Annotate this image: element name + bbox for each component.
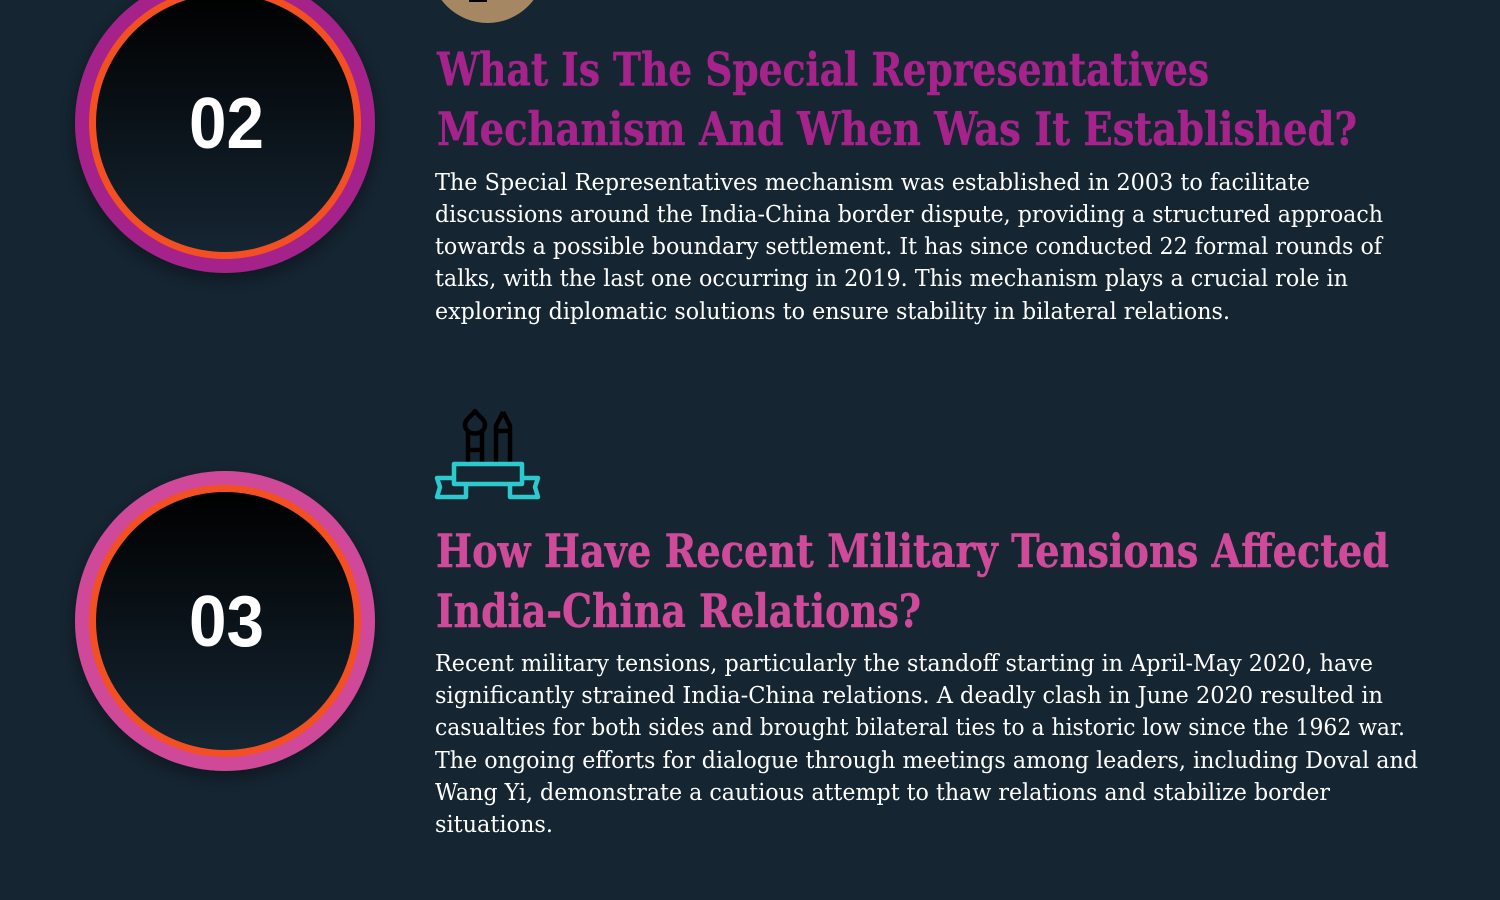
icon: brush and pencil on ribbon	[437, 411, 538, 497]
text block: military tensions description: Recent military tensions, particularly the standoff starting in April-May 2020, have	[435, 649, 1373, 677]
text block: military tensions description: The ongoing efforts for dialogue through meetings among leaders, including Doval and	[435, 746, 1418, 774]
text block: mechanism description: exploring diplomatic solutions to ensure stability in bilateral relations.	[435, 297, 1230, 325]
heading: special representatives mechanism	[436, 42, 1357, 156]
text block: mechanism description: talks, with the last one occurring in 2019. This mechanism plays a crucial role in	[435, 264, 1348, 292]
heading: military tensions	[436, 524, 1389, 638]
badge: number 02	[75, 0, 375, 273]
text block: mechanism description: discussions around the India-China border dispute, providing a structured approach	[435, 200, 1383, 228]
text block: military tensions description: casualties for both sides and brought bilateral ties to a historic low since the 1962 war.	[435, 713, 1405, 741]
badge: number 03: 03	[189, 582, 264, 662]
text block: mechanism description	[435, 168, 1384, 325]
text block: mechanism description: towards a possible boundary settlement. It has since conducted 22 formal rounds of	[435, 232, 1384, 260]
icon: partial tan circle	[430, 0, 545, 23]
brush and pencil	[465, 411, 510, 462]
badge: number 02: 02	[189, 84, 264, 164]
text block: mechanism description: The Special Representatives mechanism was established in 2003 to facilitate	[435, 168, 1310, 196]
heading: special representatives mechanism: What Is The Special Representatives	[436, 42, 1209, 96]
text block: military tensions description	[435, 649, 1418, 838]
text block: military tensions description: situations.	[435, 810, 553, 838]
text block: military tensions description: significantly strained India-China relations. A deadly clash in June 2020 resulted in	[435, 681, 1383, 709]
ribbon	[437, 464, 538, 497]
badge: number 03	[75, 471, 375, 771]
heading: military tensions: India-China Relations?	[436, 584, 921, 638]
text block: military tensions description: Wang Yi, demonstrate a cautious attempt to thaw relations and stabilize border	[435, 778, 1331, 806]
